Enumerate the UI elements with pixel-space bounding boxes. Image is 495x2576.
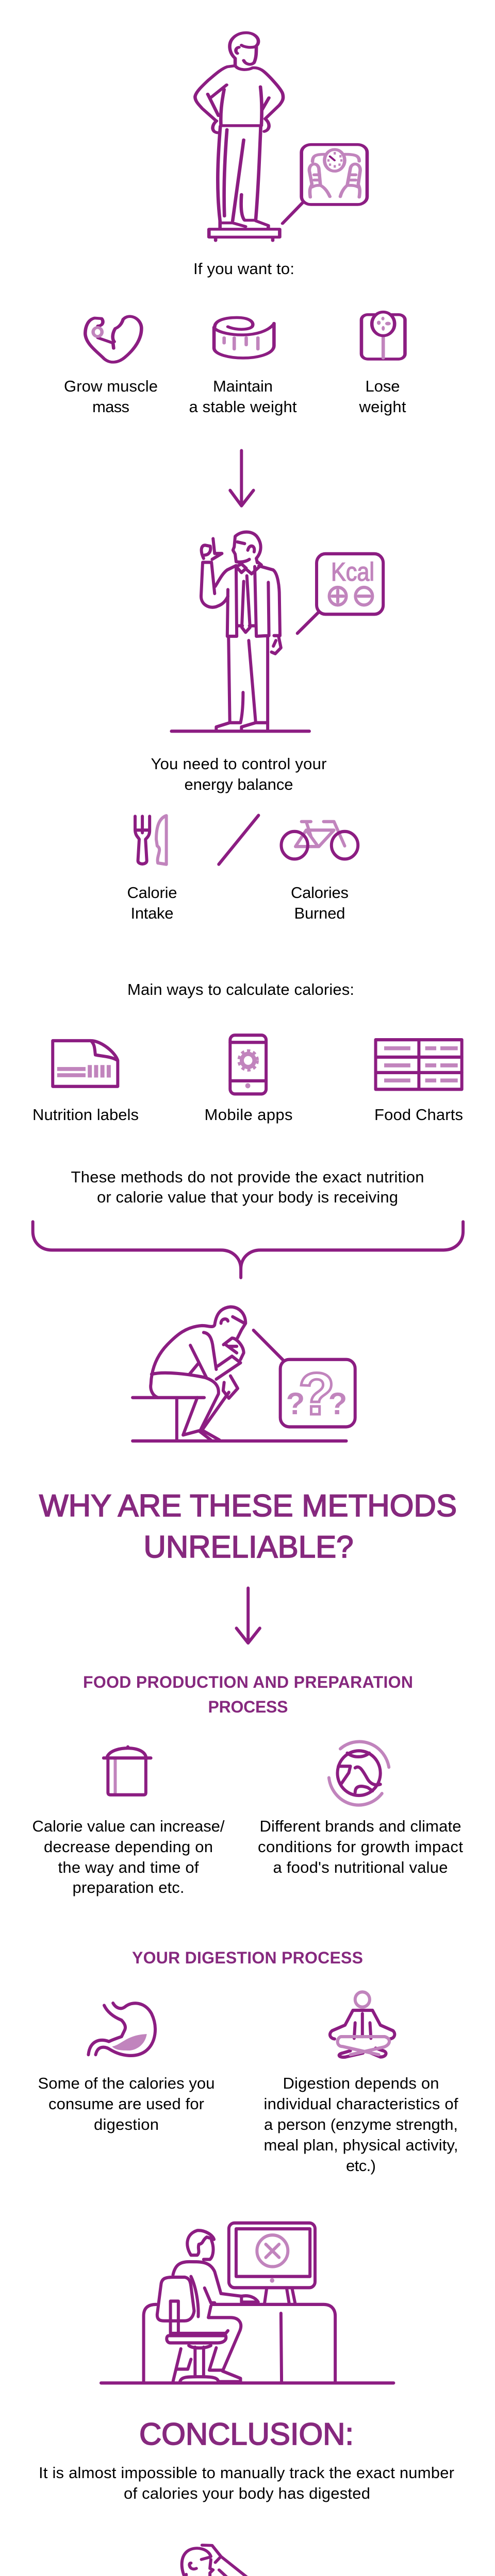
text: digestion columns: etc.) [346,2157,376,2175]
illustration: man in suit with kcal callout [171,532,383,731]
text: kcal on callout: Kcal [331,557,374,586]
labels: three goals: mass [92,398,129,416]
text: methods caveat [71,1168,424,1206]
text: energy balance [151,755,327,793]
icon: bathroom scale [361,312,405,359]
question marks [286,1361,347,1427]
icon: stomach [88,2003,155,2056]
illustration: man on scale [195,33,367,241]
text: food production columns: the way and time of [58,1858,199,1876]
text: methods caveat: These methods do not provide the exact nutrition [71,1168,424,1186]
heading: why unreliable: WHY ARE THESE METHODS [39,1488,457,1523]
heading: food production: PROCESS [208,1698,288,1716]
labels: three goals: Grow muscle [64,377,158,395]
heading: digestion: YOUR DIGESTION PROCESS [132,1948,363,1967]
icon: measuring tape [214,317,274,358]
illustration: thinking man with question callout [133,1307,355,1441]
heading: why unreliable [39,1488,457,1564]
icon: food chart [376,1040,462,1089]
labels: intake and burned: Burned [294,904,345,922]
brace [33,1222,463,1278]
labels: three methods: Mobile apps [204,1106,293,1124]
text: digestion columns: digestion [94,2115,159,2133]
text: digestion columns [38,2074,458,2175]
labels: intake and burned [127,884,349,922]
labels: three goals: a stable weight [189,398,297,416]
labels: three methods: Nutrition labels [32,1106,139,1124]
text: energy balance: energy balance [185,775,293,793]
text: conclusion body: of calories your body has digested [124,2484,370,2502]
labels: three methods [32,1106,463,1124]
labels: intake and burned: Calories [291,884,349,902]
labels: three goals [64,377,406,416]
labels: three goals: weight [359,398,406,416]
heading: food production [83,1673,413,1716]
text: digestion columns: meal plan, physical activity, [264,2136,458,2154]
text: if you want to: If you want to: [193,260,294,278]
heading: food production: FOOD PRODUCTION AND PREPARATION [83,1673,413,1691]
text: food production columns [32,1817,463,1896]
heading: conclusion: CONCLUSION: [139,2417,354,2451]
illustration: puzzled man with wristband callout [73,2545,426,2576]
icon: fork and knife [135,816,167,865]
icon: meditating person [330,1992,394,2057]
text: digestion columns: individual characteristics of [264,2095,458,2113]
text: food production columns: conditions for growth impact [258,1838,463,1856]
divider slash [219,816,258,865]
text: methods caveat: or calorie value that your body is receiving [97,1188,398,1206]
text: digestion columns: a person (enzyme strength, [264,2115,458,2133]
icon: mobile phone [230,1035,266,1094]
illustration: man at computer [101,2223,393,2383]
labels: intake and burned: Intake [131,904,173,922]
icon: globe [329,1742,389,1805]
icon: bicycle [281,822,358,859]
icon: flexed muscle [85,316,141,362]
question marks: ? [299,1361,335,1427]
text: main ways: Main ways to calculate calories: [127,980,354,998]
labels: three goals: Maintain [213,377,273,395]
labels: three goals: Lose [365,377,400,395]
text: food production columns: Calorie value can increase/ [32,1817,225,1835]
arrow: down [237,1588,260,1643]
icon: nutrition label [53,1041,118,1087]
icon: cooking pot [104,1747,151,1795]
text: food production columns: preparation etc. [72,1878,185,1896]
text: digestion columns: Digestion depends on [283,2074,439,2092]
question marks: ? [328,1386,347,1421]
text: digestion columns: consume are used for [48,2095,204,2113]
text: digestion columns: Some of the calories you [38,2074,214,2092]
question marks: ? [286,1386,305,1421]
text: food production columns: a food's nutritional value [273,1858,448,1876]
text: food production columns: decrease depending on [44,1838,213,1856]
text: energy balance: You need to control your [151,755,327,773]
arrow: down [230,451,254,506]
text: conclusion body [39,2464,454,2502]
text: food production columns: Different brands and climate [260,1817,461,1835]
heading: why unreliable: UNRELIABLE? [143,1530,354,1564]
text: conclusion body: It is almost impossible to manually track the exact number [39,2464,454,2482]
labels: three methods: Food Charts [374,1106,463,1124]
labels: intake and burned: Calorie [127,884,177,902]
